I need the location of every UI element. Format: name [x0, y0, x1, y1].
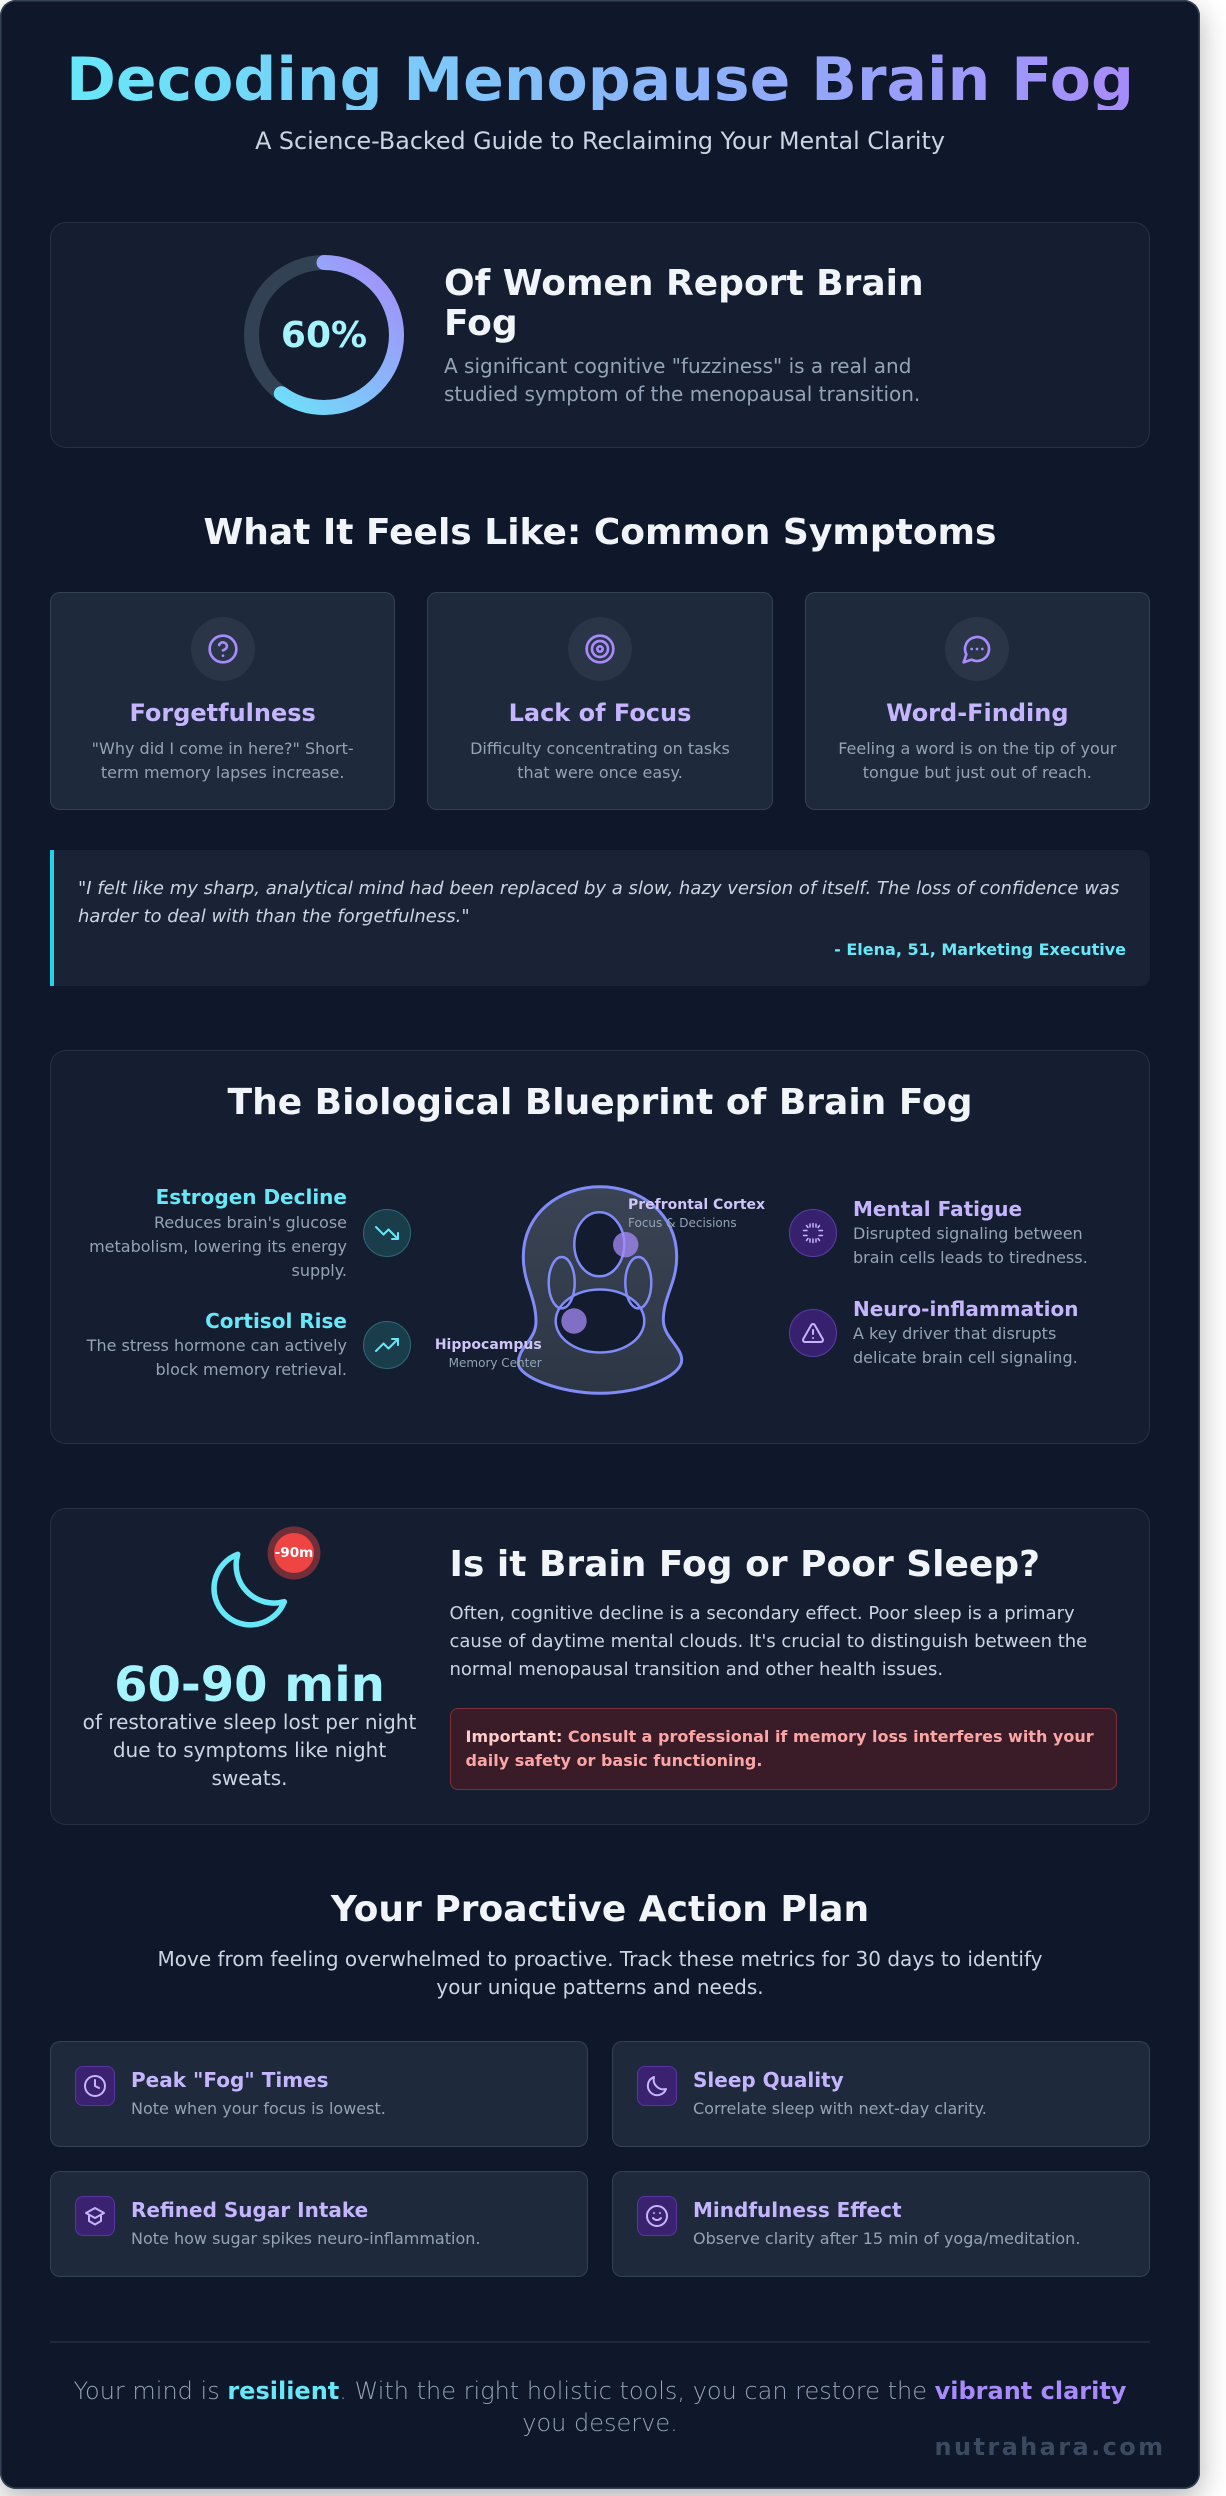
factor text: The stress hormone can actively: [87, 1336, 347, 1355]
quote text: harder to deal with than the forgetfulness.": [78, 906, 470, 926]
stat heading: Of Women Report Brain: [444, 263, 924, 304]
panel: sleep quality: [612, 2041, 1150, 2147]
item title: Sleep Quality: [693, 2068, 844, 2092]
card text: [470, 739, 730, 782]
item title: Mindfulness Effect: [693, 2198, 902, 2222]
card text: Feeling a word is on the tip of your: [838, 739, 1116, 758]
watermark: nutrahara.com: [934, 2433, 1166, 2461]
subtitle: A Science-Backed Guide to Reclaiming Your Mental Clarity: [255, 127, 945, 155]
closing statement: Your mind is resilient. With the right holistic tools, you can restore the vibrant clarity: [74, 2376, 1126, 2404]
card text: "Why did I come in here?" Short-: [92, 739, 354, 758]
card text: tongue but just out of reach.: [863, 763, 1092, 782]
effect text: delicate brain cell signaling.: [853, 1348, 1078, 1367]
effect text: A key driver that disrupts: [853, 1324, 1056, 1343]
card title: Word-Finding: [886, 699, 1069, 727]
factor text: supply.: [291, 1260, 347, 1280]
action plan intro: Move from feeling overwhelmed to proactive. Track these metrics for 30 days to identify: [158, 1947, 1042, 1971]
stat description: A significant cognitive "fuzziness" is a real and: [444, 354, 911, 378]
effect: neuro-inflammation: [789, 1297, 1078, 1367]
body text: Often, cognitive decline is a secondary effect. Poor sleep is a primary: [450, 1603, 1075, 1624]
card text: that were once easy.: [517, 763, 683, 782]
stat description: [83, 1710, 416, 1790]
quote text: "I felt like my sharp, analytical mind had been replaced by a slow, hazy version of itself. The loss of confidence was: [78, 878, 1119, 898]
label: prefrontal cortex: [628, 1197, 765, 1230]
item text: Observe clarity after 15 min of yoga/meditation.: [693, 2229, 1080, 2248]
card title: Forgetfulness: [129, 699, 316, 727]
stat: 60-90 min: 60-90 min: [114, 1656, 385, 1712]
quote text: [78, 878, 1119, 926]
panel: forgetfulness card: [50, 592, 395, 810]
panel heading: The Biological Blueprint of Brain Fog: [228, 1082, 972, 1123]
heading: common symptoms: What It Feels Like: Common Symptoms: [203, 512, 996, 553]
stat description: [444, 354, 920, 406]
item text: Note how sugar spikes neuro-inflammation.: [131, 2229, 480, 2248]
heading: action plan: Your Proactive Action Plan: [331, 1889, 869, 1930]
icon: target: [568, 617, 632, 681]
item text: Correlate sleep with next-day clarity.: [693, 2099, 987, 2118]
stat description: studied symptom of the menopausal transition.: [444, 382, 920, 406]
panel: mindfulness effect: [612, 2171, 1150, 2277]
quote author: - Elena, 51, Marketing Executive: [834, 940, 1126, 959]
item text: Note when your focus is lowest.: [131, 2099, 386, 2118]
body text: [450, 1603, 1087, 1680]
effect text: brain cells leads to tiredness.: [853, 1248, 1088, 1267]
effect: mental fatigue: [789, 1197, 1088, 1267]
icon: smile: [637, 2196, 677, 2236]
icon: moon with badge: [211, 1526, 320, 1628]
icon: loader ticks: [789, 1209, 837, 1257]
donut chart: 60%: [244, 255, 404, 415]
icon: question circle: [191, 617, 255, 681]
closing statement: you deserve.: [522, 2408, 678, 2436]
factor text: metabolism, lowering its energy: [89, 1236, 347, 1256]
card text: Difficulty concentrating on tasks: [470, 739, 730, 758]
brain diagram: [516, 1185, 684, 1395]
callout: important warning: Important: Consult a professional if memory loss interferes with your: [466, 1727, 1094, 1746]
donut chart: 60%: 60%: [281, 315, 367, 356]
stat description: due to symptoms like night: [113, 1738, 386, 1762]
effect text: [853, 1224, 1088, 1267]
factor title: Estrogen Decline: [156, 1185, 347, 1209]
label: hippocampus: Memory Center: [449, 1356, 542, 1370]
card text: [838, 739, 1116, 782]
icon: speech bubble: [945, 617, 1009, 681]
item title: Refined Sugar Intake: [131, 2198, 368, 2222]
factor title: Cortisol Rise: [205, 1309, 347, 1333]
badge: minus 90 minutes: [274, 1533, 314, 1573]
panel: lack of focus card: [427, 592, 773, 810]
stat description: of restorative sleep lost per night: [83, 1710, 416, 1734]
action plan intro: your unique patterns and needs.: [436, 1975, 764, 1999]
factor text: block memory retrieval.: [156, 1360, 347, 1379]
action plan intro: [158, 1947, 1042, 1999]
body text: normal menopausal transition and other health issues.: [450, 1659, 943, 1680]
stat heading: [444, 263, 924, 344]
label: prefrontal cortex: Focus & Decisions: [628, 1216, 737, 1230]
title: Decoding Menopause Brain Fog: [66, 45, 1134, 115]
panel: brain fog or poor sleep: [50, 1508, 1150, 1825]
panel: peak fog times: [50, 2041, 588, 2147]
label: prefrontal cortex: Prefrontal Cortex: [628, 1197, 765, 1213]
effect title: Neuro-inflammation: [853, 1297, 1078, 1321]
closing statement: [74, 2376, 1126, 2436]
icon: moon: [637, 2066, 677, 2106]
icon: warning triangle: [789, 1309, 837, 1357]
effect text: Disrupted signaling between: [853, 1224, 1083, 1243]
badge: minus 90 minutes: -90m: [275, 1545, 313, 1561]
card text: term memory lapses increase.: [101, 763, 344, 782]
icon: trending down: [363, 1209, 411, 1257]
label: hippocampus: Hippocampus: [435, 1337, 542, 1353]
factor text: [86, 1336, 347, 1379]
stat description: sweats.: [212, 1766, 287, 1790]
callout: important warning: [450, 1708, 1117, 1790]
panel: refined sugar intake: [50, 2171, 588, 2277]
panel: word-finding card: [805, 592, 1150, 810]
card title: Lack of Focus: [509, 699, 691, 727]
icon: trending up: [363, 1321, 411, 1369]
callout: important warning: daily safety or basic functioning.: [466, 1751, 762, 1770]
item title: Peak "Fog" Times: [131, 2068, 328, 2092]
panel: 60 percent statistic: [50, 222, 1150, 448]
stat heading: Fog: [444, 303, 518, 344]
label: hippocampus: [435, 1337, 542, 1370]
factor: estrogen decline: [89, 1185, 411, 1280]
factor: cortisol rise: [86, 1309, 411, 1379]
heading: Is it Brain Fog or Poor Sleep?: [450, 1544, 1040, 1584]
panel: testimonial quote: [50, 850, 1150, 986]
body text: cause of daytime mental clouds. It's crucial to distinguish between the: [450, 1631, 1087, 1652]
factor text: Reduces brain's glucose: [154, 1212, 347, 1232]
panel: biological blueprint: [50, 1050, 1150, 1444]
effect text: [853, 1324, 1078, 1367]
icon: clock: [75, 2066, 115, 2106]
icon: layered box: [75, 2196, 115, 2236]
effect title: Mental Fatigue: [853, 1197, 1022, 1221]
card text: [92, 739, 354, 782]
factor text: [89, 1212, 347, 1280]
